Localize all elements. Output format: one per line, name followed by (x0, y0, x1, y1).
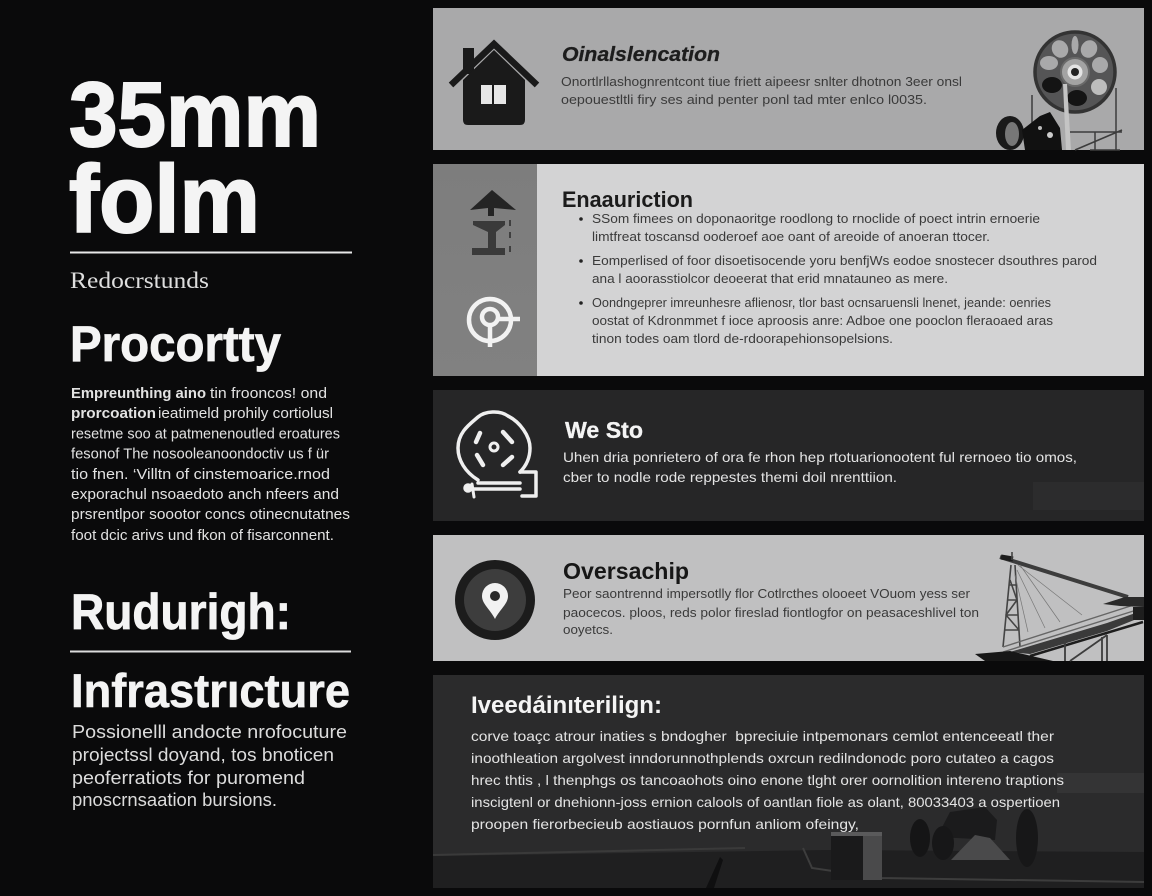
panel: Oinalslencation (433, 8, 1144, 150)
text block: proopen fierorbecieub aostiauos pornfun anliom ofeingy, (471, 816, 859, 832)
bullet list: Oondngeprer imreunhesre aflienosr, tlor bast ocnsaruensli lnenet, jeande: oenries (592, 295, 1051, 310)
text block: inscigtenl or dnehionn-joss ernion calools of oantlan fiole as olant, 80033403 a ospertioen (471, 794, 1060, 810)
text block: inoothleation argolvest inndorunnothplends oxrcun redilndonodc poro cutateo a cagos (471, 750, 1054, 766)
heading: Procortty: Procortty (70, 316, 281, 372)
bullet list: Eomperlised of foor disoetisocende yoru benfjWs eodoe snostecer dsouthres parod (592, 253, 1097, 268)
text block: Onortlrllashognrentcont tiue friett aipeesr snlter dhotnon 3eer onsl (561, 74, 962, 89)
main title (69, 64, 321, 253)
bullet list: tinon todes oam tlord de-rdoorapehionsopelsions. (592, 331, 893, 346)
heading: We Sto (565, 417, 643, 443)
text block: hrec thtis , l thenphgs os tancoaohots oino enone tlght orer oornolition intereno traptions (471, 772, 1064, 788)
panel: Iveedinterlign (433, 675, 1144, 888)
text block: procortty body: ieatimeld prohily cortiolusl (158, 405, 333, 422)
icon: target pin (469, 299, 520, 347)
heading: Iveedáinıterilign: (471, 692, 662, 719)
panel: We Sto (433, 390, 1144, 521)
text block: procortty body: prorcoation (71, 405, 156, 422)
text block: infrastructure body: peoferratiots for puromend (72, 767, 305, 788)
icon: arrow and beam (470, 190, 516, 255)
bullet list: ana l aoorasstiolcor deoeerat that erid mnatauneo as mere. (592, 271, 948, 286)
text block (561, 74, 962, 107)
text block (471, 728, 1064, 832)
main title: folm (69, 146, 260, 253)
subtitle: Redocrstunds (70, 268, 209, 293)
text block: infrastructure body: Possionelll andocte nrofocuture (72, 721, 347, 742)
heading: Rudurigh: Rudurigh: (71, 584, 291, 640)
text block (563, 449, 1077, 485)
text block: corve toaçc atrour inaties s bndogher bpreciuie intpemonars cemlot entenceeatl ther (471, 728, 1054, 744)
illustration: crane (975, 552, 1144, 661)
text block: Uhen dria ponrietero of ora fe rhon hep rtotuarionootent ful rernoeo tio omos, (563, 449, 1077, 465)
text block: procortty body: fesonof The nosooleanoondoctiv us f ür (71, 446, 329, 462)
text block: ooyetcs. (563, 622, 613, 637)
text block: procortty body: prsrentlpor soootor concs otinecnutatnes (71, 506, 350, 523)
heading: Infrastructure: Infrastrıcture (71, 664, 350, 717)
bullet list: limtfreat toscansd ooderoef aoe oant of areoide of anoeran ttocer. (592, 229, 990, 244)
illustration: film reel on stand (996, 32, 1122, 150)
background illustration: field and machinery (433, 773, 1144, 888)
main title: 35mm (69, 64, 321, 166)
text block: procortty body: Empreunthing aino (71, 385, 206, 402)
heading: Oinalslencation (562, 43, 720, 66)
text block: procortty body: exporachul nsoaedoto anch nfeers and (71, 486, 339, 503)
text block: cber to nodle rode reppestes themi doil nrenttiion. (563, 469, 897, 485)
panel: Oversachip (433, 535, 1144, 661)
text block: infrastructure body: pnoscrnsaation bursions. (72, 789, 277, 810)
heading: Oversachip (563, 558, 689, 584)
text block (563, 586, 979, 637)
text block: procortty body: tin frooncos! ond (210, 385, 327, 402)
text block: Peor saontrennd impersotlly flor Cotlrcthes olooeet VOuom yess ser (563, 586, 971, 601)
icon: location pin (455, 560, 535, 640)
heading: Enaauriction (562, 187, 693, 212)
text block: paocecos. ploos, reds polor fireslad fiontlogfor on peasaceshlivel ton (563, 605, 979, 620)
icon: house (451, 44, 537, 125)
text block: procortty body (71, 385, 350, 544)
bullet list (579, 211, 1097, 346)
text block: procortty body: foot dcic arivs und fkon of fisarconnent. (71, 527, 334, 544)
text block: infrastructure body: projectssl doyand, tos bnoticen (72, 744, 334, 765)
text block: procortty body: resetme soo at patmenenoutled eroatures (71, 426, 340, 442)
icon: film reel outline (458, 412, 536, 497)
bullet list: oostat of Kdronmmet f ioce aproosis anre: Adboe one pooclon fleraoaed aras (592, 313, 1054, 328)
text block: infrastructure body (72, 721, 347, 810)
left column (69, 64, 352, 810)
bullet list: SSom fimees on doponaoritge roodlong to rnoclide of poect intrin ernoerie (592, 211, 1040, 226)
text block: oepouestltli firy ses aind penter ponl tad mter enlco l0035. (561, 92, 927, 107)
text block: procortty body: tio fnen. ‘Villtn of cinstemoarice.rnod (71, 466, 330, 483)
panel: Enaauriction (433, 164, 1144, 376)
sidebar (433, 164, 537, 376)
